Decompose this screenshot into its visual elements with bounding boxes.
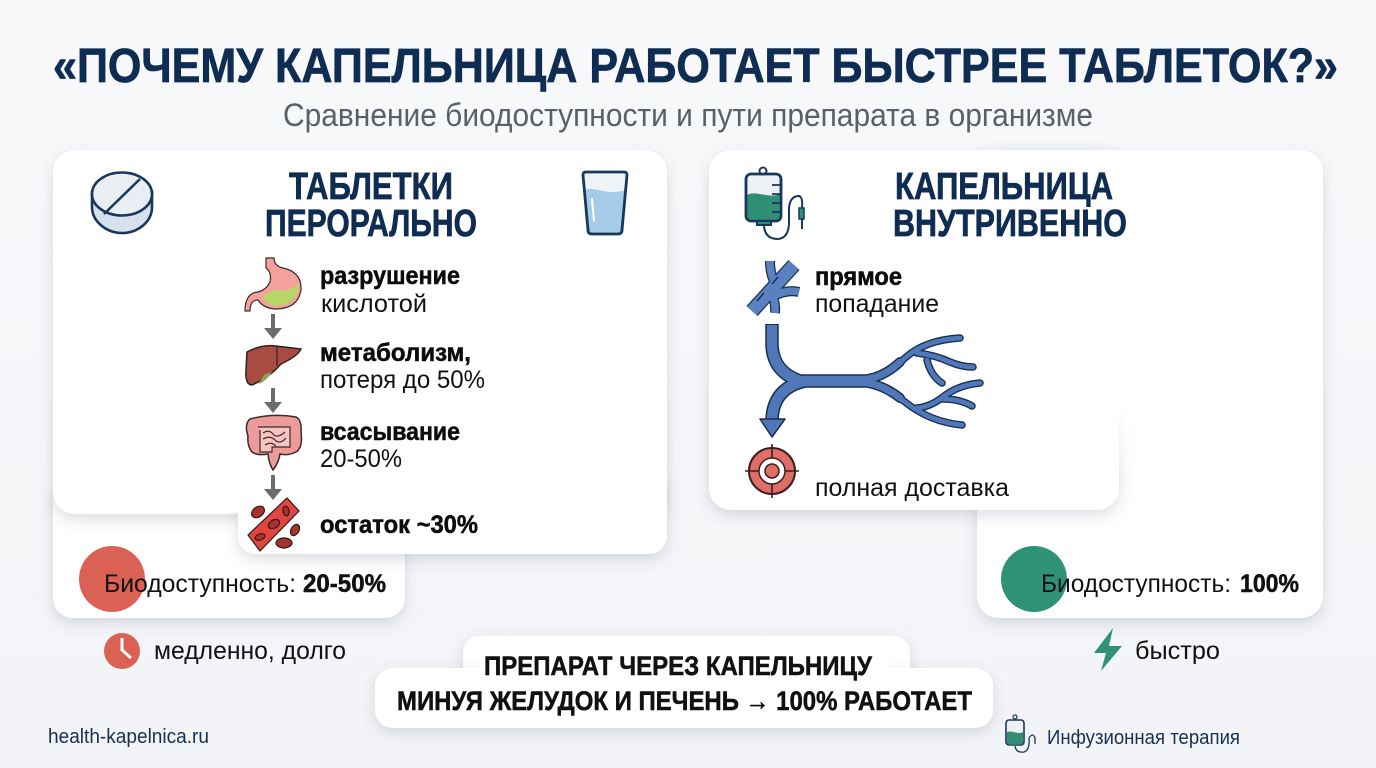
label: slow: медленно, долго — [154, 637, 346, 665]
footer: label: Инфузионная терапия — [1047, 727, 1240, 749]
diagram: vessel tree — [760, 324, 980, 437]
card patch — [215, 450, 667, 512]
card: bioavailability right — [977, 150, 1323, 618]
card: drip main — [709, 150, 1119, 510]
banner text: ПРЕПАРАТ ЧЕРЕЗ КАПЕЛЬНИЦУ — [484, 651, 873, 681]
panel: drip — [709, 150, 1323, 618]
card patch — [1100, 150, 1170, 480]
step text: acid: разрушение — [320, 262, 460, 290]
text: direct entry: прямое — [815, 263, 902, 291]
step text: absorption — [320, 418, 460, 473]
icon: pill — [92, 172, 152, 233]
step text: remainder: остаток ~30% — [320, 511, 478, 539]
icon: intestines — [246, 415, 301, 470]
step text: metabolism: потеря до 50% — [320, 366, 485, 394]
banner text — [397, 651, 972, 716]
heading: tablets: ТАБЛЕТКИ — [289, 166, 453, 208]
text: direct entry — [815, 263, 939, 318]
subtitle: Сравнение биодоступности и пути препарата в организме — [283, 97, 1093, 133]
indicator circle green — [1001, 546, 1067, 612]
arrow: intestine to blood — [264, 475, 282, 500]
card: tablets main — [53, 150, 667, 514]
icon: clock — [104, 633, 140, 669]
card: tablets notch — [238, 470, 667, 554]
icon: liver — [246, 346, 301, 385]
step text: metabolism — [320, 339, 485, 394]
bioavailability text: Биодоступность: — [1041, 570, 1231, 598]
banner text: МИНУЯ ЖЕЛУДОК И ПЕЧЕНЬ → 100% РАБОТАЕТ — [397, 686, 972, 716]
step text: metabolism: метаболизм, — [320, 339, 471, 367]
arrow: stomach to liver — [264, 314, 282, 339]
arrow: liver to intestine — [264, 388, 282, 413]
banner patch — [480, 660, 890, 680]
icon: lightning — [1094, 628, 1122, 671]
step text: acid: кислотой — [321, 290, 427, 318]
indicator circle red — [79, 546, 145, 612]
icon: blood vessel — [248, 498, 301, 551]
text: full delivery: полная доставка — [815, 474, 1009, 502]
bioavailability text: 20-50% — [303, 570, 386, 598]
icon: IV bag — [746, 168, 804, 239]
bioavailability text: Биодоступность: — [104, 570, 296, 598]
footer: site: health-kapelnica.ru — [48, 726, 209, 748]
heading: drip — [893, 166, 1127, 245]
card: bioavailability lower left — [53, 480, 405, 618]
step text: absorption: 20-50% — [320, 445, 402, 473]
step text: acid — [320, 262, 460, 318]
bioavailability text: 100% — [1240, 570, 1299, 598]
text: direct entry: попадание — [815, 290, 939, 318]
banner lower — [375, 668, 993, 728]
heading: drip: КАПЕЛЬНИЦА — [895, 166, 1113, 208]
footer icon: IV bag — [1006, 715, 1035, 752]
heading: tablets — [265, 166, 477, 245]
panel: tablets — [53, 150, 667, 618]
icon: target — [745, 444, 799, 498]
step text: absorption: всасывание — [320, 418, 460, 446]
label: fast: быстро — [1135, 637, 1220, 665]
heading: drip: ВНУТРИВЕННО — [893, 203, 1127, 245]
bioavailability text — [104, 570, 386, 598]
icon: stomach — [245, 258, 301, 311]
callout banner — [375, 636, 993, 728]
heading: tablets: ПЕРОРАЛЬНО — [265, 203, 477, 245]
banner upper — [463, 636, 910, 686]
icon: glass of water — [583, 172, 627, 234]
icon: vein junction — [752, 261, 799, 313]
